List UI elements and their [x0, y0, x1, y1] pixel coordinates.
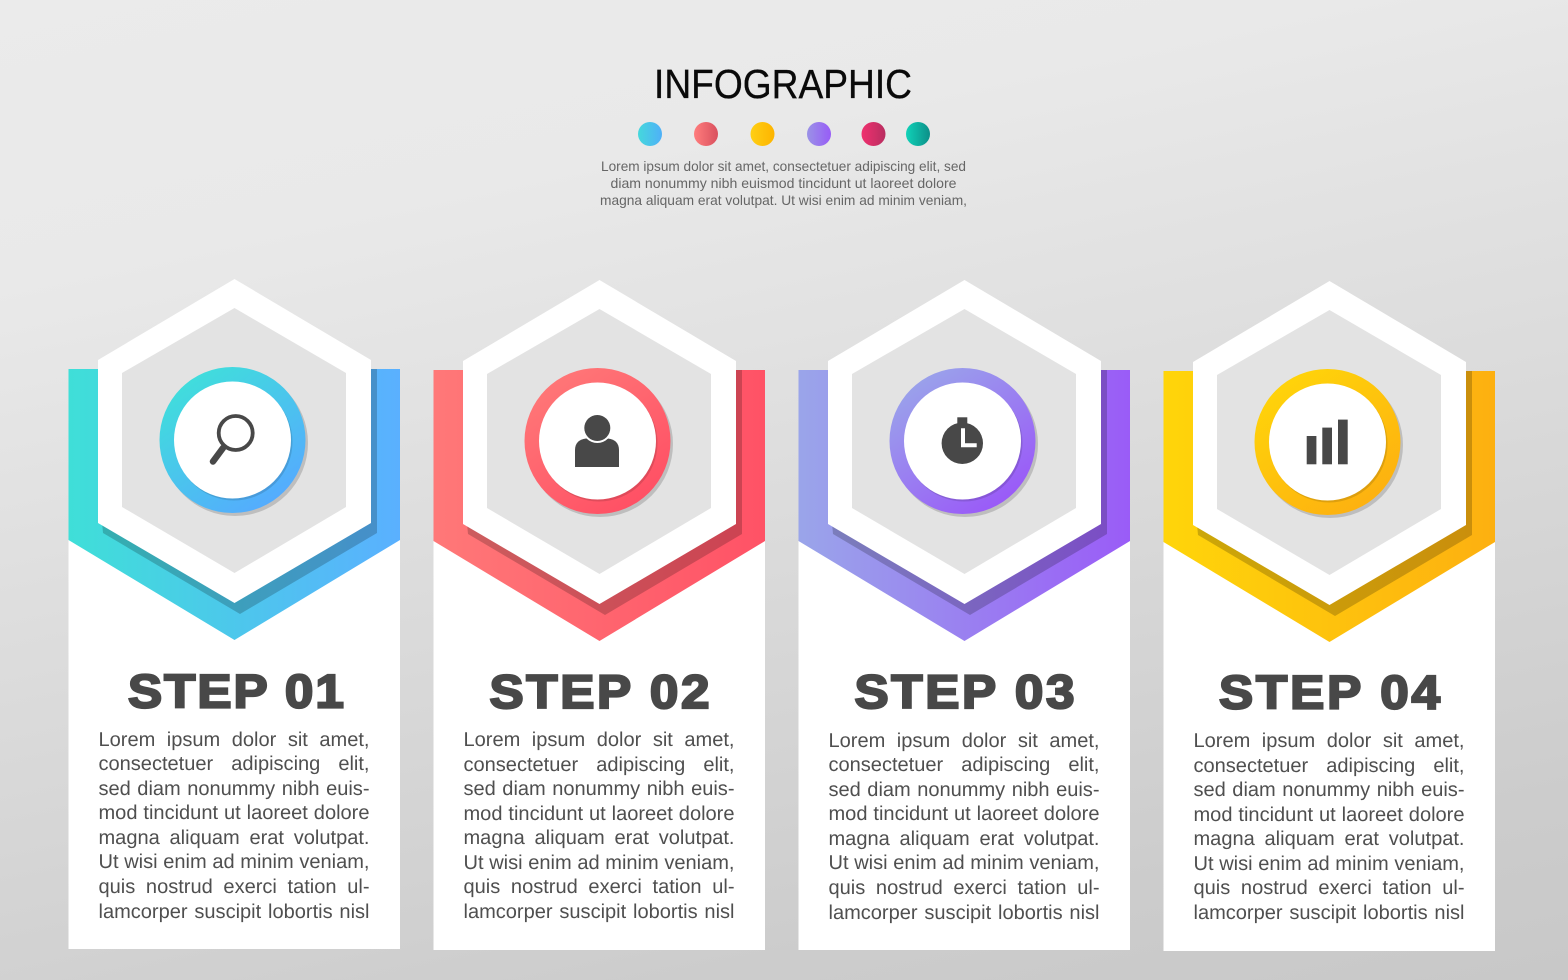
intro text: diam nonummy nibh euismod tincidunt ut laoreet dolore	[610, 175, 957, 191]
body text: lamcorper suscipit lobortis nisl	[1194, 902, 1464, 924]
body text: mod tincidunt ut laoreet dolore	[828, 803, 1100, 825]
icon: magnifier	[213, 416, 253, 462]
panel: step 03	[798, 280, 1130, 950]
body text: sed diam nonummy nibh euis-	[98, 778, 370, 800]
panel: step 02	[434, 280, 765, 950]
body text: magna aliquam erat volutpat.	[1194, 828, 1464, 850]
step heading: STEP 04	[1219, 666, 1441, 719]
body text: Lorem ipsum dolor sit amet,	[1194, 730, 1464, 752]
body text: mod tincidunt ut laoreet dolore	[464, 803, 734, 825]
body text: lamcorper suscipit lobortis nisl	[828, 902, 1100, 924]
body text: Lorem ipsum dolor sit amet,	[828, 730, 1100, 752]
body text: magna aliquam erat volutpat.	[828, 828, 1100, 850]
body text: sed diam nonummy nibh euis-	[828, 779, 1100, 801]
body text: magna aliquam erat volutpat.	[98, 827, 370, 849]
intro text: magna aliquam erat volutpat. Ut wisi enim ad minim veniam,	[600, 192, 967, 208]
body text: mod tincidunt ut laoreet dolore	[1194, 804, 1464, 826]
body text: Lorem ipsum dolor sit amet,	[98, 729, 370, 751]
icon: bar chart	[1307, 419, 1348, 464]
body text: quis nostrud exerci tation ul-	[98, 876, 370, 898]
title: INFOGRAPHIC	[654, 61, 912, 107]
icon: stopwatch	[942, 417, 983, 464]
body text: consectetuer adipiscing elit,	[828, 754, 1100, 776]
body text: consectetuer adipiscing elit,	[1194, 755, 1464, 777]
icon: person	[575, 412, 619, 466]
body text: Ut wisi enim ad minim veniam,	[828, 852, 1100, 874]
intro text: Lorem ipsum dolor sit amet, consectetuer adipiscing elit, sed	[601, 158, 966, 174]
intro text	[600, 158, 967, 208]
body text: consectetuer adipiscing elit,	[98, 753, 370, 775]
body text	[464, 729, 734, 923]
body text: quis nostrud exerci tation ul-	[464, 876, 734, 898]
body text: Ut wisi enim ad minim veniam,	[98, 851, 370, 873]
body text: sed diam nonummy nibh euis-	[464, 778, 734, 800]
body text: quis nostrud exerci tation ul-	[1194, 877, 1464, 899]
colour dots	[638, 122, 930, 146]
body text	[828, 730, 1100, 924]
body text: lamcorper suscipit lobortis nisl	[98, 901, 370, 923]
body text: Ut wisi enim ad minim veniam,	[464, 852, 734, 874]
body text: Lorem ipsum dolor sit amet,	[464, 729, 734, 751]
header	[600, 61, 967, 208]
body text: sed diam nonummy nibh euis-	[1194, 779, 1464, 801]
step heading: STEP 02	[490, 665, 709, 718]
panel: step 04	[1164, 281, 1495, 951]
body text: mod tincidunt ut laoreet dolore	[98, 802, 370, 824]
body text: quis nostrud exerci tation ul-	[828, 877, 1100, 899]
body text	[98, 729, 370, 923]
step heading: STEP 03	[854, 666, 1074, 719]
body text	[1194, 730, 1464, 924]
body text: lamcorper suscipit lobortis nisl	[464, 901, 734, 923]
body text: magna aliquam erat volutpat.	[464, 827, 734, 849]
body text: consectetuer adipiscing elit,	[464, 754, 734, 776]
step heading: STEP 01	[128, 665, 344, 718]
body text: Ut wisi enim ad minim veniam,	[1194, 853, 1464, 875]
panel: step 01	[68, 279, 400, 949]
